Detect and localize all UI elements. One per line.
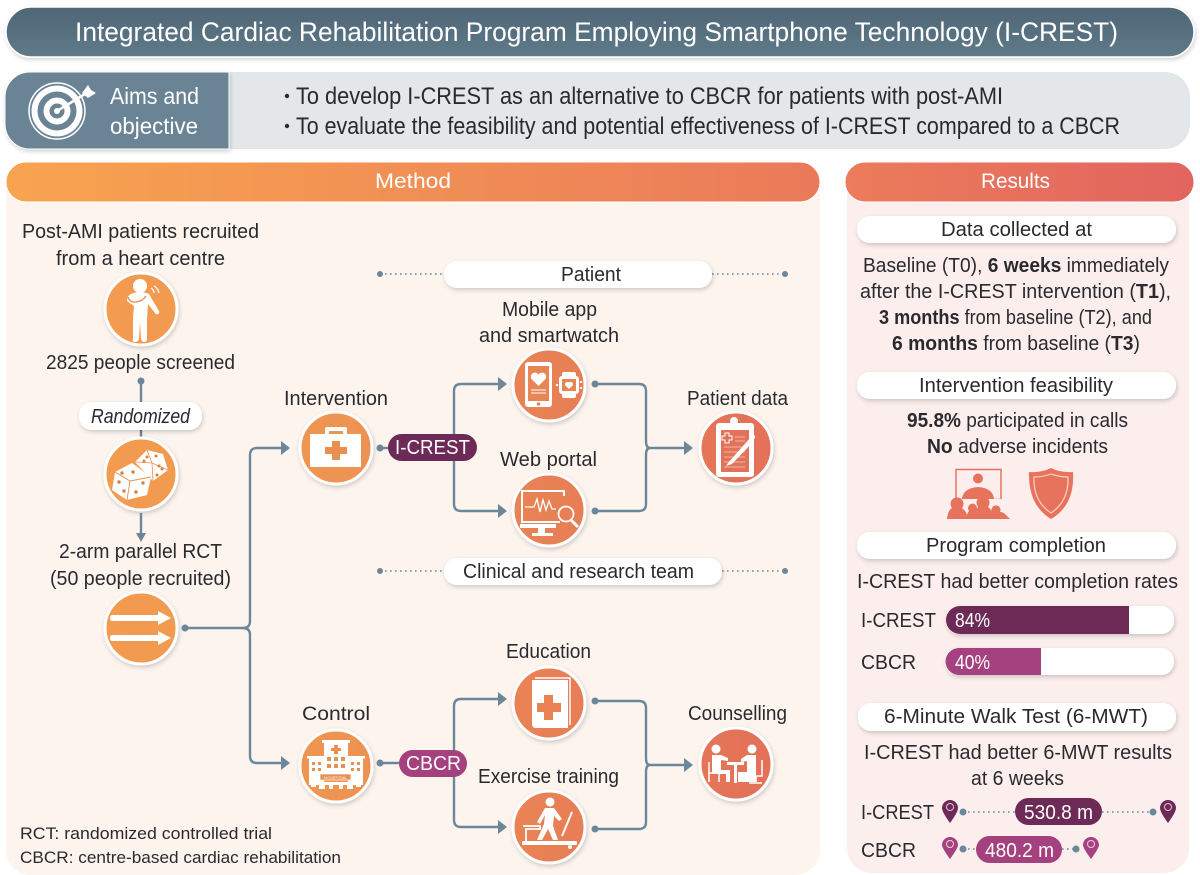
recruitment label: Post-AMI patients recruited	[22, 221, 259, 243]
bar: I-CREST 84%: 84%	[955, 610, 990, 632]
control label: Control	[302, 704, 370, 725]
exercise training label: Exercise training	[478, 766, 619, 788]
web portal label: Web portal	[500, 449, 597, 471]
icon: clipboard	[700, 412, 772, 484]
bar: CBCR 40%: CBCR	[861, 652, 916, 674]
counselling label: Counselling	[688, 703, 787, 725]
RCT label: (50 people recruited)	[50, 568, 231, 590]
icon: hospital	[300, 730, 372, 802]
icon: monitor with magnifier	[513, 474, 585, 546]
CBCR pill: CBCR	[406, 753, 461, 775]
icon: phone and smartwatch	[513, 349, 585, 421]
mobile app label: and smartwatch	[479, 325, 619, 347]
feasibility text: No adverse incidents	[927, 436, 1108, 458]
aims heading	[110, 83, 199, 139]
mobile app label	[479, 299, 619, 347]
data collected heading: Data collected at	[941, 219, 1092, 241]
icon: shield	[1029, 468, 1073, 519]
CBCR branch connector	[376, 692, 507, 834]
program completion heading: Program completion	[926, 535, 1106, 557]
mobile app label: Mobile app	[502, 299, 597, 321]
patient pill	[377, 261, 788, 288]
panel: aims and objective	[5, 72, 1190, 149]
data collected heading	[857, 216, 1176, 243]
data collected text	[860, 255, 1171, 355]
panel: results	[845, 162, 1194, 873]
I-CREST branch connector	[376, 377, 507, 518]
education label: Education	[506, 641, 591, 663]
icon: two arrows	[105, 592, 177, 664]
icon: video call group	[947, 470, 1010, 519]
clinical team pill: Clinical and research team	[463, 561, 694, 583]
aims bullet list: To evaluate the feasibility and potential effectiveness of I-CREST compared to a CBCR	[296, 113, 1120, 140]
6-MWT text: I-CREST had better 6-MWT results	[864, 742, 1172, 764]
arrow: dice to RCT	[136, 513, 146, 542]
connector: screened to randomized	[138, 378, 144, 437]
patient pill: Patient	[561, 264, 621, 286]
I-CREST pill: I-CREST	[395, 437, 470, 459]
bar: I-CREST 84%: I-CREST	[861, 610, 936, 632]
recruitment label: from a heart centre	[56, 248, 225, 270]
recruitment label	[22, 221, 259, 270]
abbreviations note	[20, 825, 341, 867]
intervention label: Intervention	[284, 388, 388, 410]
patient data label: Patient data	[687, 388, 789, 410]
icon: medical book	[513, 667, 585, 739]
RCT label: 2-arm parallel RCT	[59, 541, 222, 563]
distance: I-CREST 530.8 m	[861, 798, 1176, 825]
randomized pill: Randomized	[91, 406, 191, 428]
bar: CBCR 40%	[861, 648, 1174, 675]
6-MWT heading: 6-Minute Walk Test (6-MWT)	[884, 706, 1148, 728]
control-side connector to counselling	[592, 698, 693, 832]
6-MWT text	[864, 742, 1172, 790]
icon: dice	[105, 438, 177, 510]
icon: counselling	[700, 728, 772, 800]
data collected text: 6 months from baseline (T3)	[892, 333, 1140, 355]
feasibility text	[907, 410, 1128, 458]
title banner: Integrated Cardiac Rehabilitation Program Employing Smartphone Technology (I-CREST)	[75, 17, 1118, 47]
CBCR pill	[399, 750, 467, 777]
patient-side connector to patient data	[592, 380, 693, 514]
results header	[845, 162, 1194, 202]
abbreviations note: RCT: randomized controlled trial	[20, 825, 272, 843]
aims heading: Aims and	[110, 83, 199, 109]
intervention feasibility heading	[857, 372, 1176, 399]
title banner	[6, 7, 1194, 57]
panel: method	[6, 162, 820, 875]
method header	[6, 162, 820, 202]
aims heading: objective	[110, 113, 198, 139]
bar: CBCR 40%: 40%	[955, 652, 990, 674]
icon: patient with chest pain	[105, 273, 177, 345]
data collected text: Baseline (T0), 6 weeks immediately	[863, 255, 1169, 277]
feasibility text: 95.8% participated in calls	[907, 410, 1128, 432]
clinical team pill	[377, 558, 788, 585]
icon: treadmill	[513, 791, 585, 863]
completion text: I-CREST had better completion rates	[857, 571, 1178, 593]
distance: I-CREST 530.8 m: 530.8 m	[1024, 802, 1093, 824]
data collected text: after the I-CREST intervention (T1),	[860, 281, 1171, 303]
arrows: allocation to intervention and control	[182, 441, 290, 770]
data collected text: 3 months from baseline (T2), and	[879, 307, 1152, 329]
intervention feasibility heading: Intervention feasibility	[919, 375, 1113, 397]
abbreviations note: CBCR: centre-based cardiac rehabilitation	[20, 849, 341, 867]
distance: CBCR 480.2 m: 480.2 m	[985, 840, 1054, 862]
6-MWT text: at 6 weeks	[971, 768, 1064, 790]
aims bullet list: To develop I-CREST as an alternative to CBCR for patients with post-AMI	[296, 83, 1003, 110]
distance: CBCR 480.2 m	[861, 836, 1099, 863]
method header: Method	[375, 170, 451, 193]
results header: Results	[981, 170, 1050, 193]
aims bullet list	[285, 83, 1120, 140]
distance: CBCR 480.2 m: CBCR	[861, 840, 916, 862]
6-MWT heading	[858, 703, 1176, 731]
icon: target	[29, 83, 96, 139]
distance: I-CREST 530.8 m: I-CREST	[861, 802, 934, 824]
screened label: 2825 people screened	[46, 352, 235, 374]
bar: I-CREST 84%	[861, 606, 1174, 634]
program completion heading	[857, 532, 1176, 559]
RCT label	[50, 541, 231, 590]
bar chart: program completion	[861, 606, 1174, 675]
icon: first aid kit	[300, 412, 372, 484]
hospital sign: HOSPITAL	[324, 775, 348, 780]
